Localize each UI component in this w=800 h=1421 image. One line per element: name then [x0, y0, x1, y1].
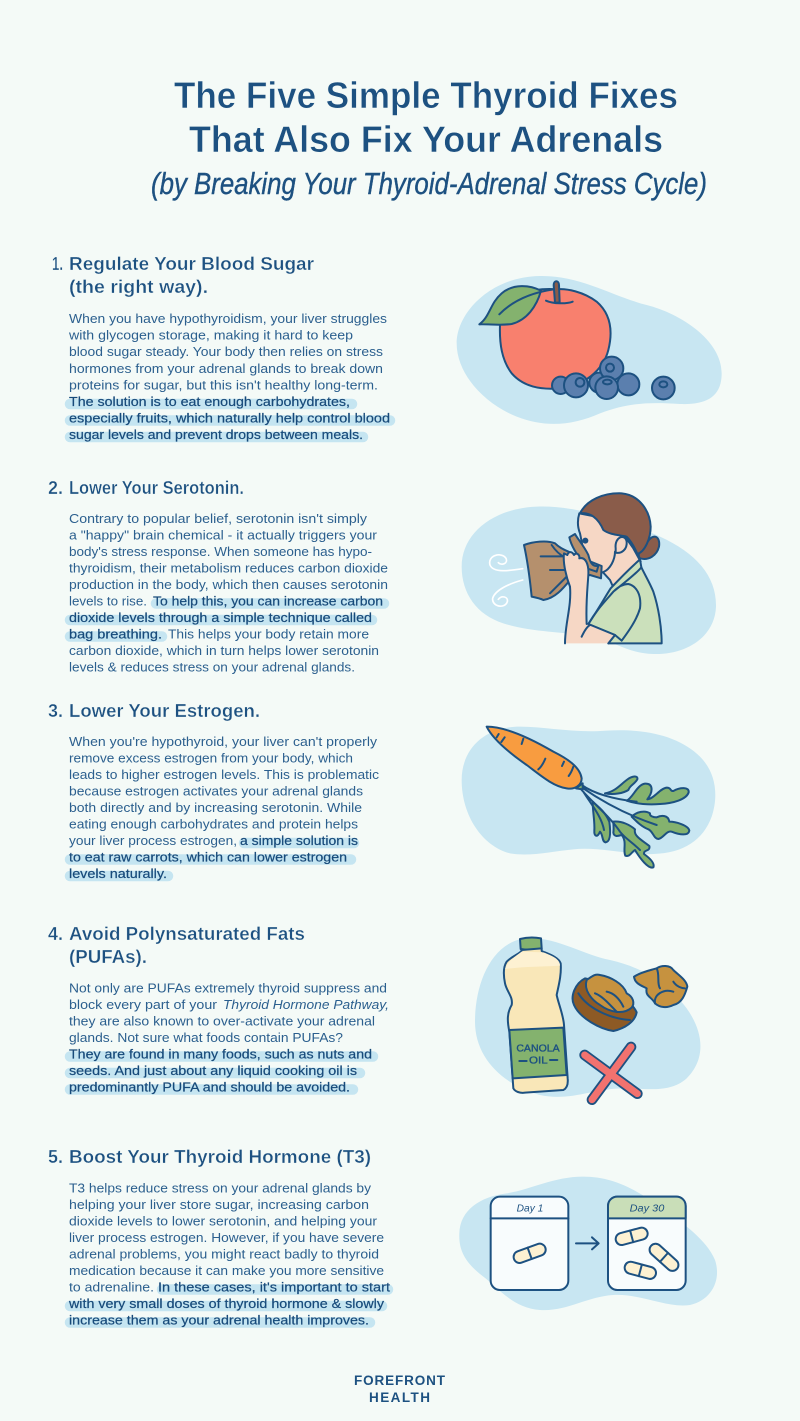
- body text 2: thyroidism, their metabolism reduces carbon dioxide: [69, 560, 388, 576]
- body text 4: seeds. And just about any liquid cooking oil is: [69, 1063, 358, 1078]
- heading 1: Regulate Your Blood Sugar: [69, 253, 314, 274]
- heading 5: 5.: [48, 1146, 63, 1167]
- heading 3: 3.: [48, 700, 63, 721]
- body text 5: to adrenaline.: [69, 1280, 154, 1294]
- heading 4: (PUFAs).: [69, 946, 147, 967]
- body text 2: bag breathing.: [69, 626, 162, 642]
- body text 1: hormones from your adrenal glands to break down: [69, 361, 383, 376]
- heading 1: (the right way).: [69, 276, 208, 297]
- heading 2: Lower Your Serotonin.: [69, 477, 244, 498]
- body text 3: [69, 734, 380, 881]
- icon: day 1 box: [491, 1197, 568, 1290]
- body text 5: helping your liver store sugar, increasing carbon: [69, 1197, 369, 1212]
- logo: Forefront Health: [354, 1373, 446, 1405]
- body text 2: carbon dioxide, which in turn helps lower serotonin: [69, 643, 379, 658]
- heading 4: 4.: [48, 923, 63, 944]
- body text 3: because estrogen activates your adrenal glands: [69, 784, 364, 798]
- body text 2: a "happy" brain chemical - it actually triggers your: [69, 528, 378, 542]
- heading 1: [52, 253, 314, 297]
- heading 3: Lower Your Estrogen.: [69, 700, 260, 721]
- heading 1: 1.: [52, 253, 63, 274]
- section 4: avoid PUFAs: [48, 923, 700, 1100]
- body text 3: When you're hypothyroid, your liver can't properly: [69, 734, 378, 749]
- icon: day 30 box: Day 30: [630, 1203, 665, 1214]
- body text 1: When you have hypothyroidism, your liver struggles: [69, 311, 388, 326]
- body text 2: dioxide levels through a simple technique called: [69, 610, 372, 625]
- body text 1: with glycogen storage, making it hard to keep: [68, 328, 353, 342]
- icon: day 1 box: Day 1: [517, 1203, 543, 1214]
- body text 1: [68, 311, 390, 442]
- body text 5: medication because it can make you more sensitive: [69, 1263, 384, 1278]
- icon: red cross: [585, 1047, 637, 1100]
- body text 1: blood sugar steady. Your body then relies on stress: [69, 344, 384, 359]
- illustration: carrot: [462, 727, 715, 868]
- illustration: apple and blueberries: [457, 276, 722, 424]
- body text 4: Thyroid Hormone Pathway,: [223, 997, 389, 1012]
- section 1: regulate blood sugar: [52, 253, 722, 442]
- heading 5: Boost Your Thyroid Hormone (T3): [69, 1146, 371, 1167]
- body text 3: leads to higher estrogen levels. This is problematic: [69, 767, 380, 782]
- body text 1: especially fruits, which naturally help control blood: [69, 410, 390, 426]
- body text 4: They are found in many foods, such as nuts and: [69, 1046, 372, 1062]
- section 2: lower serotonin: [48, 477, 716, 674]
- body text 2: This helps your body retain more: [168, 626, 369, 642]
- body text 3: both directly and by increasing serotonin. While: [69, 800, 362, 815]
- logo: Forefront Health: FOREFRONT: [354, 1373, 446, 1388]
- body text 4: Not only are PUFAs extremely thyroid suppress and: [69, 980, 387, 996]
- title: The Five Simple Thyroid Fixes: [174, 75, 678, 116]
- subtitle: (by Breaking Your Thyroid-Adrenal Stress Cycle): [151, 166, 707, 201]
- body text 2: To help this, you can increase carbon: [153, 594, 383, 608]
- icon: oil bottle: CANOLA: [516, 1044, 560, 1055]
- icon: oil bottle: OIL: [529, 1056, 548, 1067]
- body text 1: proteins for sugar, but this isn't healthy long-term.: [69, 378, 378, 392]
- body text 5: liver process estrogen. However, if you have severe: [69, 1230, 384, 1245]
- icon: walnuts: [573, 966, 687, 1031]
- body text 3: remove excess estrogen from your body, which: [69, 750, 353, 766]
- heading 4: [48, 923, 305, 967]
- body text 5: In these cases, it's important to start: [158, 1280, 390, 1294]
- body text 2: production in the body, which then causes serotonin: [69, 577, 388, 592]
- body text 5: increase them as your adrenal health improves.: [69, 1312, 369, 1328]
- body text 3: eating enough carbohydrates and protein helps: [69, 816, 359, 832]
- icon: day 30 box: [608, 1197, 686, 1290]
- heading 2: 2.: [48, 477, 63, 498]
- body text 5: adrenal problems, you might react badly to thyroid: [69, 1246, 379, 1262]
- body text 5: [68, 1180, 390, 1328]
- body text 3: levels naturally.: [69, 866, 167, 881]
- body text 1: sugar levels and prevent drops between meals.: [69, 427, 363, 442]
- body text 2: [69, 511, 388, 674]
- body text 5: with very small doses of thyroid hormone & slowly: [68, 1296, 385, 1311]
- body text 3: to eat raw carrots, which can lower estrogen: [69, 850, 347, 864]
- body text 3: a simple solution is: [240, 833, 359, 848]
- heading 4: Avoid Polynsaturated Fats: [69, 923, 305, 944]
- icon: oil bottle: [504, 938, 568, 1093]
- title: That Also Fix Your Adrenals: [189, 119, 663, 160]
- body text 4: glands. Not sure what foods contain PUFAs?: [69, 1030, 343, 1045]
- body text 2: levels & reduces stress on your adrenal glands.: [69, 660, 355, 674]
- body text 4: they are also known to over-activate your adrenal: [69, 1014, 375, 1028]
- body text 5: dioxide levels to lower serotonin, and helping your: [69, 1214, 378, 1228]
- body text 4: [69, 980, 389, 1094]
- body text 3: your liver process estrogen,: [69, 833, 237, 848]
- title: [174, 75, 678, 160]
- illustration: person breathing into paper bag: [462, 493, 716, 654]
- logo: Forefront Health: HEALTH: [369, 1390, 430, 1405]
- illustration: canola oil and walnuts: [475, 938, 700, 1100]
- illustration: day 1 and day 30 pill boxes: [459, 1177, 717, 1310]
- body text 2: levels to rise.: [69, 594, 147, 608]
- body text 4: predominantly PUFA and should be avoided.: [69, 1080, 350, 1094]
- body text 2: body's stress response. When someone has hypo-: [69, 544, 372, 559]
- section 5: boost T3: [48, 1146, 717, 1328]
- body text 2: Contrary to popular belief, serotonin isn't simply: [69, 511, 368, 526]
- body text 4: block every part of your: [69, 997, 218, 1012]
- section 3: lower estrogen: [48, 700, 715, 881]
- body text 5: T3 helps reduce stress on your adrenal glands by: [69, 1180, 372, 1196]
- icon: arrow: [576, 1237, 599, 1249]
- body text 1: The solution is to eat enough carbohydrates,: [69, 394, 350, 409]
